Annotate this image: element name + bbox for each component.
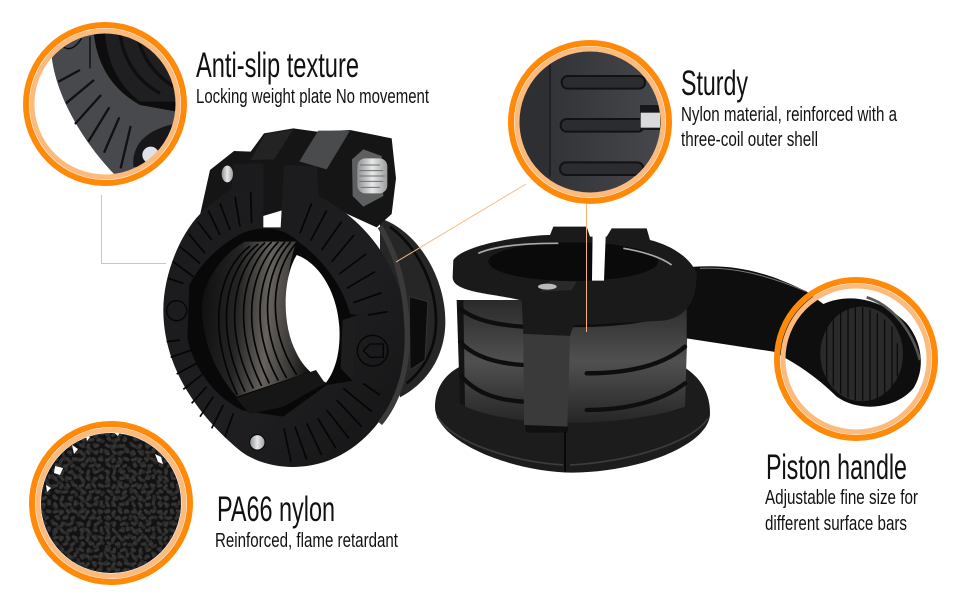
text: anti-slip description: Locking weight plate No movement: [196, 86, 429, 108]
text: sturdy description: Nylon material, reinforced with a: [681, 104, 898, 126]
rim ticks: [167, 192, 387, 462]
hinge pillar: [523, 334, 570, 427]
callout: anti-slip detail: [26, 25, 184, 183]
clamp slit: [592, 228, 606, 281]
hinge and pins: [250, 435, 265, 450]
text: sturdy description: [681, 104, 898, 151]
callout: nylon pellets detail: [32, 424, 190, 582]
detail photo: rim texture: [52, 27, 180, 177]
heading: PA66 nylon: PA66 nylon: [217, 490, 335, 529]
ring: [511, 43, 669, 201]
callout: sturdy detail: [511, 43, 669, 201]
handle grip: [820, 307, 903, 401]
heading: sturdy: Sturdy: [681, 64, 748, 103]
clamp face: [163, 163, 407, 467]
ring: [32, 424, 190, 582]
text: piston description: [765, 487, 918, 535]
callout line: sturdy to clamp: [396, 184, 526, 262]
body: [458, 300, 688, 423]
detail photo: shell ribs: [517, 47, 663, 197]
arrow marks: [167, 301, 187, 321]
ring: [26, 25, 184, 183]
callout line: anti-slip to clamp: [102, 195, 166, 264]
heading: anti-slip texture: Anti-slip texture: [196, 46, 359, 85]
back flange: [380, 218, 445, 397]
detail photo: pellets: [41, 431, 181, 573]
text: nylon description: Reinforced, flame retardant: [215, 530, 398, 552]
callout line: sturdy to second clamp: [586, 204, 588, 332]
text: sturdy description: three-coil outer shell: [681, 129, 818, 151]
base disc: [435, 367, 710, 473]
bolt and nut: [352, 149, 383, 207]
top ring: [453, 227, 697, 336]
text: piston description: Adjustable fine size for: [765, 487, 918, 509]
handle: [687, 266, 921, 407]
bore with threads: [187, 229, 358, 417]
bore opening: [286, 255, 340, 383]
product: round clamp with bolt: [163, 128, 445, 467]
top bracket: [200, 128, 396, 227]
text: piston description: different surface bars: [765, 513, 907, 535]
product: open clamp with handle: [435, 227, 921, 473]
callout: piston handle ring: [777, 280, 935, 438]
